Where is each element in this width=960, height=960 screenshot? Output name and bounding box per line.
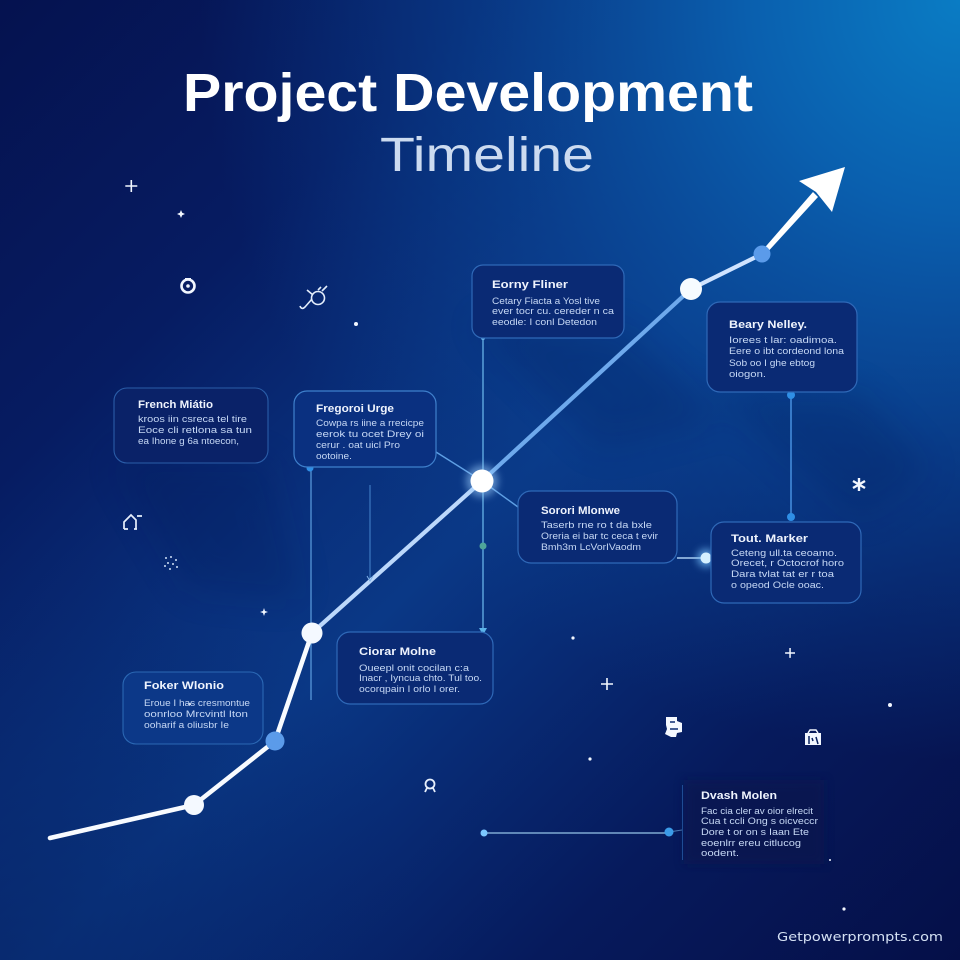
card: lower left: Foker Wlonio bbox=[144, 680, 224, 692]
card: top centre: Cetary Fiacta a Yosl tive bbox=[492, 296, 600, 306]
card: centre right: Bmh3m LcVorIVaodm bbox=[541, 542, 641, 552]
card: bottom right, borderless: Fac cia cler av oior elrecit bbox=[701, 806, 814, 816]
card: lower centre: Inacr , Iyncua chto. Tul too. bbox=[359, 673, 482, 683]
card: centre right: Sorori Mlonwe bbox=[541, 505, 620, 517]
icon: house outline bbox=[124, 515, 142, 529]
card: far left: ea Ihone g 6a ntoecon, bbox=[138, 436, 239, 446]
card: bottom right, borderless bbox=[682, 780, 824, 864]
card: top right: Iorees t lar: oadimoa. bbox=[729, 335, 837, 345]
card: centre left: ootoine. bbox=[316, 451, 352, 461]
card: lower centre: ocorqpain I orlo I orer. bbox=[359, 684, 460, 694]
card: centre left: cerur . oat uicl Pro bbox=[316, 440, 400, 450]
card: right: Ceteng ull.ta ceoamo. bbox=[731, 548, 837, 558]
card: lower left: Eroue I has cresmontue bbox=[144, 698, 250, 708]
card: bottom right, borderless: oodent. bbox=[701, 848, 739, 858]
card: bottom right, borderless: eoenlrr ereu citlucog bbox=[701, 838, 801, 848]
icon: document glyph bbox=[665, 717, 682, 737]
card: centre right bbox=[518, 491, 677, 563]
card: top centre: ever tocr cu. cereder n ca bbox=[492, 306, 614, 316]
icon: toolbox bbox=[805, 730, 821, 745]
card: top right: oiogon. bbox=[729, 369, 766, 379]
card: right: Orecet, r Octocrof horo bbox=[731, 558, 844, 568]
card: centre left: Cowpa rs iine a rrecicpe bbox=[316, 418, 424, 428]
icon: asterisk bbox=[853, 478, 865, 491]
card: top centre bbox=[472, 265, 624, 338]
title: Timeline bbox=[380, 129, 594, 182]
card: lower left: oonrloo Mrcvintl Iton bbox=[144, 709, 248, 719]
card: top right: Beary Nelley. bbox=[729, 319, 807, 331]
card: right: Dara tvlat tat er r toa bbox=[731, 569, 834, 579]
card: bottom right, borderless: Dvash Molen bbox=[701, 790, 777, 802]
card: top centre: eeodle: I conl Detedon bbox=[492, 317, 597, 327]
title bbox=[183, 63, 753, 182]
card: far left: Eoce cli retlona sa tun bbox=[138, 425, 252, 435]
icon: padlock ring bbox=[182, 279, 194, 292]
icon: gear with hook bbox=[300, 286, 327, 308]
card: centre right: Oreria ei bar tc ceca t evir bbox=[541, 531, 658, 541]
card: lower centre: Oueepl onit cocilan c:a bbox=[359, 663, 469, 673]
timeline arrow bbox=[50, 167, 845, 838]
card: lower left bbox=[123, 672, 263, 744]
watermark: Getpowerprompts.com bbox=[777, 929, 943, 944]
card: right bbox=[711, 522, 861, 603]
icon: dotted cluster bbox=[164, 556, 178, 570]
connector lines bbox=[311, 338, 791, 833]
card: centre left: eerok tu ocet Drey oi bbox=[316, 429, 424, 439]
card: lower centre: Ciorar Molne bbox=[359, 646, 436, 658]
card: bottom right, borderless: Dore t or on s Iaan Ete bbox=[701, 827, 809, 837]
stars and sparkles bbox=[125, 180, 892, 911]
card: lower centre bbox=[337, 632, 493, 704]
icon: pin ring bbox=[425, 780, 435, 792]
card: far left bbox=[114, 388, 268, 463]
card: top right: Eere o ibt cordeond lona bbox=[729, 346, 844, 356]
card: bottom right, borderless: Cua t ccli Ong s oicveccr bbox=[701, 816, 818, 826]
card: centre left bbox=[294, 391, 436, 467]
card: right: Tout. Marker bbox=[731, 533, 809, 545]
card: top centre: Eorny Fliner bbox=[492, 279, 569, 291]
card: top right: Sob oo I ghe ebtog bbox=[729, 358, 815, 368]
card: right: o opeod Ocle ooac. bbox=[731, 580, 824, 590]
card: far left: kroos iin csreca tel tire bbox=[138, 414, 247, 424]
soft diagonal shadows bbox=[114, 320, 930, 600]
timeline nodes bbox=[184, 246, 795, 836]
card: top right bbox=[707, 302, 857, 392]
card: far left: French Miátio bbox=[138, 399, 213, 411]
title: Project Development bbox=[183, 63, 753, 123]
card: centre right: Taserb rne ro t da bxle bbox=[541, 520, 652, 530]
card: lower left: ooharif a oliusbr Ie bbox=[144, 720, 229, 730]
card: centre left: Fregoroi Urge bbox=[316, 403, 394, 415]
